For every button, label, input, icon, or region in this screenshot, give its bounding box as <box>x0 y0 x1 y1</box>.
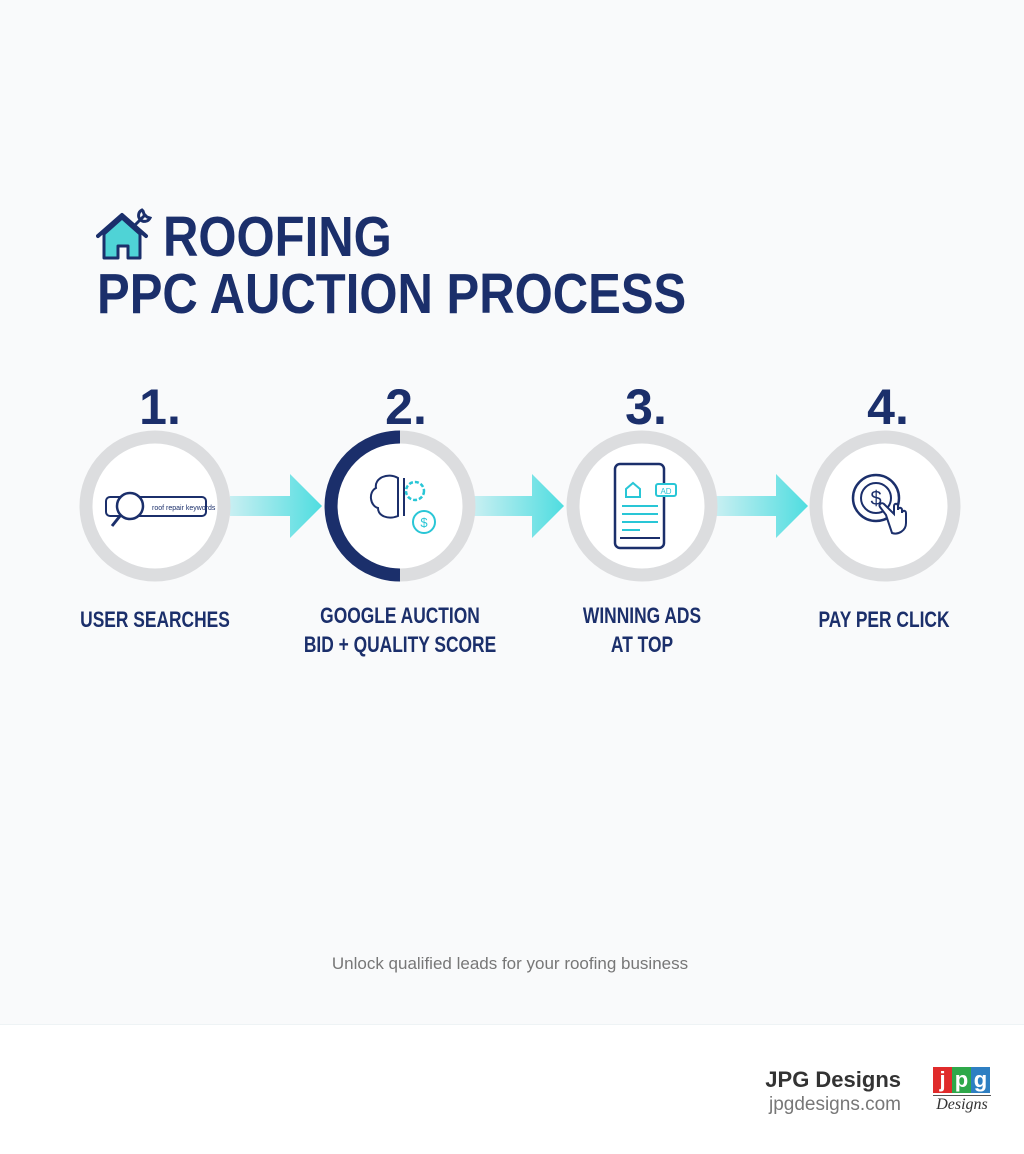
circle 4: pay per click <box>816 437 954 575</box>
footer brand text <box>765 1067 901 1115</box>
icon: house with wrench <box>96 208 152 260</box>
footer logo: p <box>955 1067 968 1092</box>
title line 2: PPC AUCTION PROCESS <box>97 262 686 326</box>
tagline: Unlock qualified leads for your roofing business <box>332 954 688 973</box>
footer logo <box>933 1067 991 1113</box>
circle 1: user searches <box>86 437 224 575</box>
footer logo: Designs <box>936 1096 988 1113</box>
step numbers: 1. <box>139 379 181 435</box>
circle 2: google auction <box>331 437 469 575</box>
footer brand text: jpgdesigns.com <box>769 1094 901 1115</box>
text: WINNING ADS <box>583 603 701 628</box>
text: PAY PER CLICK <box>818 607 950 632</box>
text: AT TOP <box>611 632 673 657</box>
text: BID + QUALITY SCORE <box>304 632 496 657</box>
text: 2. <box>385 379 427 435</box>
text: 3. <box>625 379 667 435</box>
circle 1: user searches: roof repair keywords <box>152 505 216 512</box>
text: 4. <box>867 379 909 435</box>
title line 1: ROOFING <box>163 205 392 269</box>
footer <box>0 1024 1024 1154</box>
step labels: USER SEARCHES <box>80 607 230 632</box>
footer brand text: JPG Designs <box>765 1067 901 1092</box>
text: GOOGLE AUCTION <box>320 603 480 628</box>
circle 3: winning ads: AD <box>660 487 672 496</box>
footer logo: j <box>939 1067 946 1092</box>
circle 2: google auction: $ <box>420 515 428 530</box>
circle 3: winning ads <box>573 437 711 575</box>
arrows <box>230 474 808 538</box>
footer logo: g <box>974 1067 987 1092</box>
process diagram <box>80 430 960 582</box>
circle 4: pay per click: $ <box>870 488 882 510</box>
